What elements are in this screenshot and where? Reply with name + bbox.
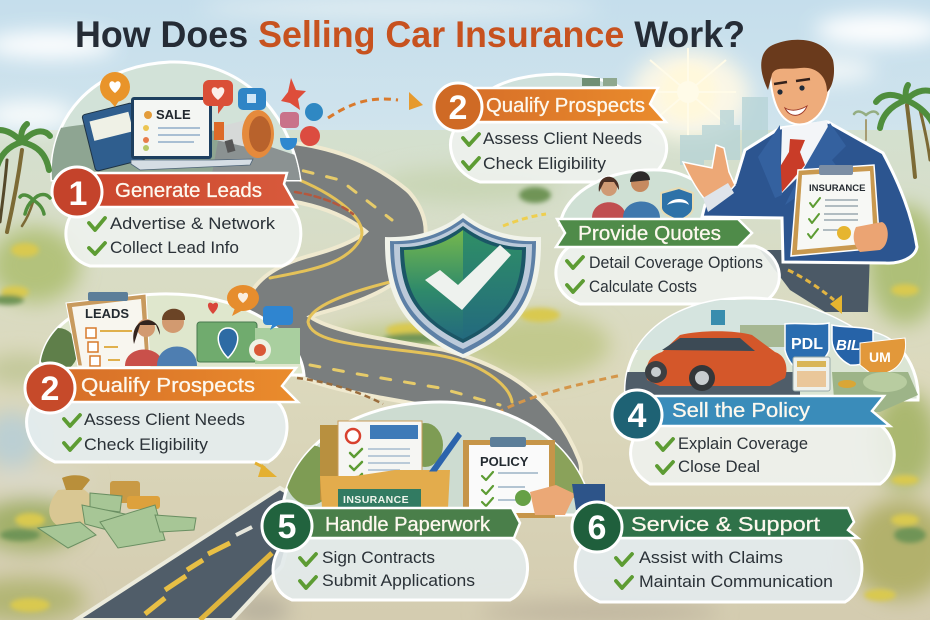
check items [567, 254, 763, 296]
banner [434, 83, 666, 131]
arrow: to quotes [503, 214, 546, 226]
check items: Maintain Communication [639, 573, 833, 591]
banner [556, 219, 752, 247]
arrow head [409, 92, 423, 110]
scene: laptop, tablet and megaphone: SALE [156, 107, 191, 122]
number badge 5 [262, 501, 312, 551]
arrow: prospects to paperwork [255, 463, 265, 468]
check items: Assess Client Needs [483, 130, 642, 148]
palm trees [0, 85, 930, 232]
arrow: left 2 to paperwork dashed [297, 378, 383, 404]
check items: Advertise & Network [110, 215, 276, 233]
number badge 2 [434, 83, 482, 131]
check items: Explain Coverage [678, 435, 808, 453]
lower road [76, 488, 300, 620]
banner [262, 501, 520, 551]
figure: smiling agent with clipboard [683, 40, 917, 263]
arrow head [258, 464, 277, 477]
number badge 4 [612, 390, 662, 440]
scene: car, shields, calculator [620, 298, 920, 412]
icon: money bag and banknotes [38, 475, 196, 548]
check items [300, 549, 475, 590]
check items: Check Eligibility [84, 436, 209, 454]
number badge 6: 6 [588, 509, 606, 547]
panel: step 1 generate leads [50, 62, 323, 266]
panel: step 6 service and support [572, 502, 862, 602]
sun and skyline [640, 48, 768, 165]
banner: Service & Support [631, 514, 821, 536]
scene: leads board, couple, icons [38, 285, 304, 375]
arrow: lead to step 2 [328, 99, 398, 118]
scene: folder and policy clipboard [282, 402, 605, 518]
list card [556, 246, 779, 304]
check items [89, 215, 276, 257]
scene: folder and policy clipboard: POLICY [480, 454, 529, 469]
check items: Sign Contracts [322, 549, 435, 567]
clipboard [791, 165, 888, 256]
check items [463, 130, 642, 173]
panel: step 5 handle paperwork [262, 402, 605, 600]
scene: car, shields, calculator: BIL [836, 337, 860, 354]
banner: Qualify Prospects [486, 95, 645, 117]
shirt [780, 120, 830, 195]
banner: Qualify Prospects [81, 375, 255, 397]
scene: family and shield [560, 170, 735, 225]
panel: step 4 sell the policy [612, 298, 920, 484]
banner: Handle Paperwork [325, 514, 491, 536]
tie [778, 139, 805, 192]
number badge 1 [52, 167, 102, 217]
scene: laptop, tablet and megaphone [50, 62, 323, 185]
title: How Does Selling Car Insurance Work? [75, 14, 745, 55]
head [761, 40, 834, 124]
scene: car, shields, calculator: PDL [791, 336, 823, 353]
hand [683, 145, 735, 212]
check items: Collect Lead Info [110, 239, 239, 257]
banner [25, 363, 298, 413]
check items: Close Deal [678, 458, 760, 476]
number badge 2 [25, 363, 75, 413]
central shield icon [385, 213, 541, 358]
road loop behind agent [760, 250, 870, 312]
banner: Sell the Policy [672, 400, 810, 422]
list card [27, 400, 287, 462]
banner label: Provide Quotes [578, 223, 721, 245]
number badge 5: 5 [278, 508, 296, 546]
banner: generate leads [52, 167, 297, 217]
number badge 2: 2 [449, 89, 467, 127]
check items: Check Eligibility [483, 155, 607, 173]
scene: car, shields, calculator: UM [869, 349, 891, 365]
check items: Calculate Costs [589, 278, 697, 296]
banner [612, 390, 890, 440]
arrow: quotes to policy [788, 270, 834, 300]
banner: generate leads: Generate Leads [115, 180, 262, 202]
scene: leads board, couple, icons: LEADS [85, 306, 129, 321]
number badge 6 [572, 502, 622, 552]
winding road [240, 165, 552, 470]
check items [64, 411, 245, 454]
jacket [702, 122, 917, 263]
clipboard: INSURANCE [809, 183, 865, 194]
number badge 4: 4 [628, 397, 647, 435]
panel: step 2 top qualify prospects [434, 74, 667, 182]
check items: Submit Applications [322, 572, 475, 590]
scene arc with buildings [490, 74, 625, 90]
check items: Assess Client Needs [84, 411, 245, 429]
check items: Assist with Claims [639, 549, 783, 567]
panel: step 2 left qualify prospects [25, 285, 304, 462]
check items [657, 435, 808, 476]
arrow head [830, 295, 842, 314]
banner [572, 502, 858, 552]
check items [616, 549, 833, 591]
number badge 2: 2 [41, 370, 59, 408]
list card [273, 538, 528, 600]
steps list card [66, 205, 301, 266]
arrow: paperwork to policy [497, 375, 622, 413]
check items: Detail Coverage Options [589, 254, 763, 272]
list card [575, 538, 862, 602]
list card [450, 122, 667, 182]
list card [631, 425, 894, 484]
scene: folder and policy clipboard: INSURANCE [343, 494, 409, 506]
panel: provide quotes [556, 170, 779, 304]
number badge 1: 1 [69, 175, 87, 213]
